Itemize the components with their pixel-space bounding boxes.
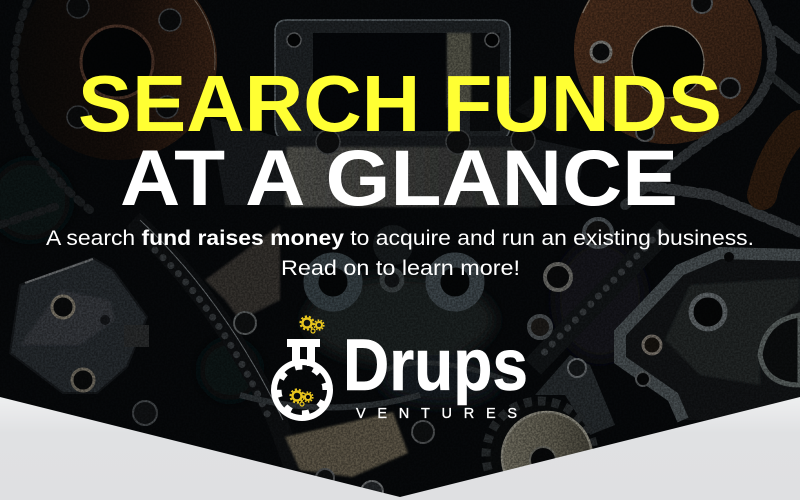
right chains bbox=[625, 0, 800, 232]
icon: yellow gears inside flask bbox=[290, 389, 313, 406]
main left chain bbox=[133, 220, 295, 470]
Drups Ventures logo bbox=[271, 316, 528, 422]
right machinery plate bbox=[620, 252, 800, 420]
icon: flask with gear cut-out bbox=[271, 339, 333, 421]
left chains bbox=[0, 0, 90, 225]
title line 2: AT A GLANCE bbox=[120, 133, 678, 222]
central engine plate with window bbox=[210, 20, 585, 207]
worn steel plate bbox=[285, 412, 408, 477]
central pulleys bbox=[311, 225, 477, 304]
intro text bbox=[46, 227, 754, 280]
right rust gear bbox=[574, 0, 762, 144]
intro line 2: Read on to learn more! bbox=[281, 257, 520, 280]
lower center shadows and bolts bbox=[133, 312, 520, 425]
bottom toothed gear bbox=[316, 401, 594, 500]
icon: yellow gears above flask bbox=[300, 316, 324, 333]
right chain and bolts bbox=[529, 219, 667, 435]
logo wordmark: Drups bbox=[343, 325, 528, 406]
bottom gray chevron bbox=[0, 397, 800, 500]
intro line 1: A search fund raises money to acquire and run an existing business. bbox=[46, 227, 754, 250]
soft tonal zones bbox=[0, 160, 645, 405]
left dark gear bbox=[17, 0, 217, 160]
bronze plate beside chain bbox=[205, 225, 280, 320]
logo subtitle: VENTURES bbox=[356, 406, 517, 422]
left machinery block bbox=[10, 258, 149, 393]
title line 1: SEARCH FUNDS bbox=[78, 59, 722, 148]
